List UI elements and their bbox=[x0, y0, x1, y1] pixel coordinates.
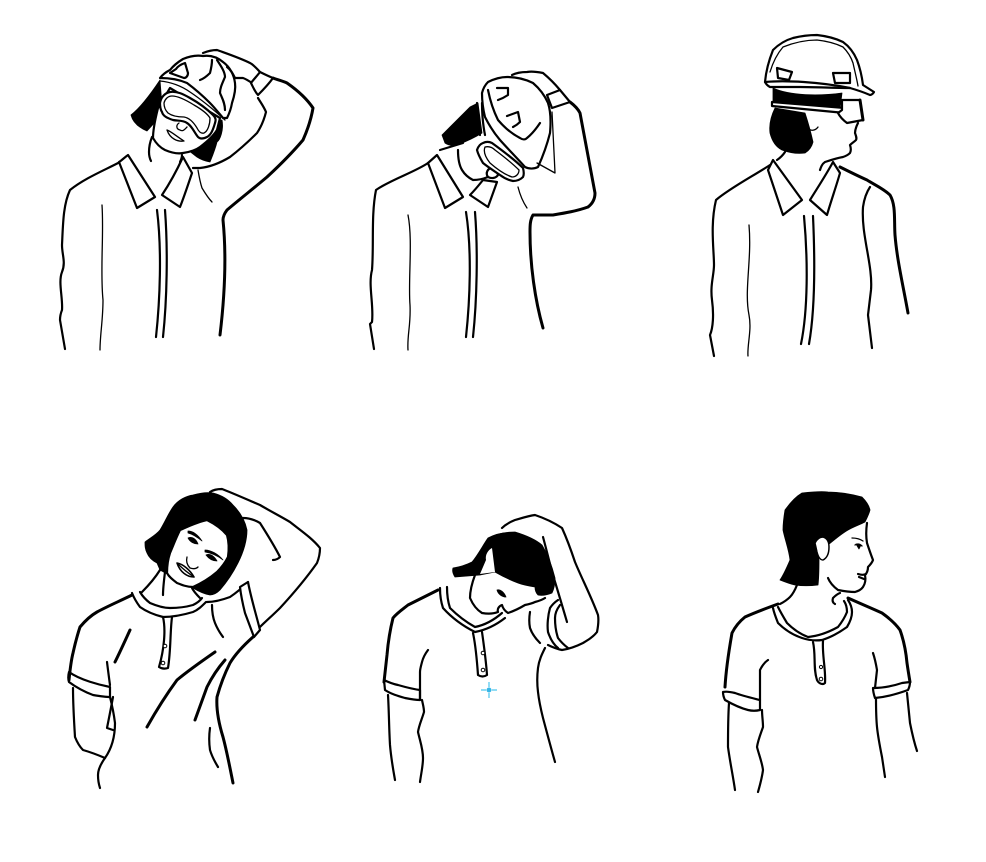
collar bbox=[119, 155, 155, 208]
neck bbox=[780, 585, 840, 604]
hair bbox=[131, 80, 223, 162]
shoulder and sleeve bbox=[69, 595, 132, 680]
figure: helmet, head tilted toward raised arm bbox=[60, 50, 313, 350]
collar bbox=[132, 592, 206, 617]
raised arm bbox=[220, 78, 313, 335]
figure: bare head bowed forward bbox=[384, 515, 598, 782]
cuff bbox=[547, 90, 570, 108]
face bbox=[458, 150, 488, 180]
hand bbox=[512, 72, 560, 90]
sparkle bbox=[481, 682, 497, 698]
face bbox=[167, 520, 229, 587]
collar bbox=[768, 160, 802, 215]
neck bbox=[149, 137, 182, 162]
hand and raised arm bbox=[502, 515, 598, 650]
face bbox=[153, 88, 220, 153]
hair bbox=[453, 532, 555, 595]
goggles bbox=[160, 92, 216, 138]
collar bbox=[773, 600, 852, 640]
ear bbox=[808, 127, 818, 130]
figure: bare head turned right bbox=[723, 492, 917, 792]
helmet bbox=[160, 56, 235, 118]
placket bbox=[473, 632, 487, 676]
face bbox=[470, 575, 545, 614]
body right side bbox=[840, 167, 908, 313]
hair bbox=[770, 108, 813, 153]
goggles bbox=[477, 142, 524, 181]
placket bbox=[159, 617, 172, 669]
sleeve bbox=[240, 582, 260, 637]
eyes bbox=[188, 531, 223, 560]
left shoulder and arm bbox=[725, 604, 778, 687]
sleeve bbox=[548, 600, 568, 648]
figure: helmet, head bowed forward bbox=[370, 72, 595, 350]
mouth bbox=[167, 130, 184, 141]
raised arm bbox=[530, 102, 595, 328]
side bbox=[537, 648, 555, 762]
shoulder and left side bbox=[60, 162, 120, 349]
goggles bbox=[838, 100, 863, 123]
left side bbox=[370, 163, 428, 349]
nose and mouth bbox=[187, 557, 198, 569]
cuff bbox=[251, 72, 273, 95]
right shoulder and arm bbox=[848, 598, 910, 682]
placket bbox=[801, 216, 814, 344]
cuff bbox=[384, 680, 420, 700]
hair bbox=[442, 103, 482, 145]
band under helmet bbox=[773, 88, 842, 109]
strap bbox=[772, 102, 845, 113]
ear bbox=[815, 537, 829, 560]
hair bbox=[780, 492, 870, 586]
ear bbox=[480, 548, 495, 574]
helmet bbox=[765, 35, 874, 95]
neck bbox=[142, 570, 200, 598]
placket bbox=[156, 210, 167, 337]
placket bbox=[466, 212, 477, 337]
shoulder bbox=[384, 590, 438, 682]
hand bbox=[203, 50, 260, 72]
face bbox=[820, 123, 858, 170]
figure: bare head tilted toward raised arm bbox=[68, 489, 320, 788]
placket bbox=[813, 641, 825, 684]
helmet bbox=[482, 77, 551, 168]
body left side bbox=[710, 165, 770, 356]
hand and raised arm bbox=[210, 489, 320, 627]
figure: helmet, head turned right bbox=[710, 35, 908, 356]
side of torso bbox=[217, 637, 253, 783]
face bbox=[828, 523, 873, 592]
collar bbox=[440, 587, 505, 632]
collar bbox=[428, 155, 463, 208]
hair bbox=[145, 493, 247, 595]
